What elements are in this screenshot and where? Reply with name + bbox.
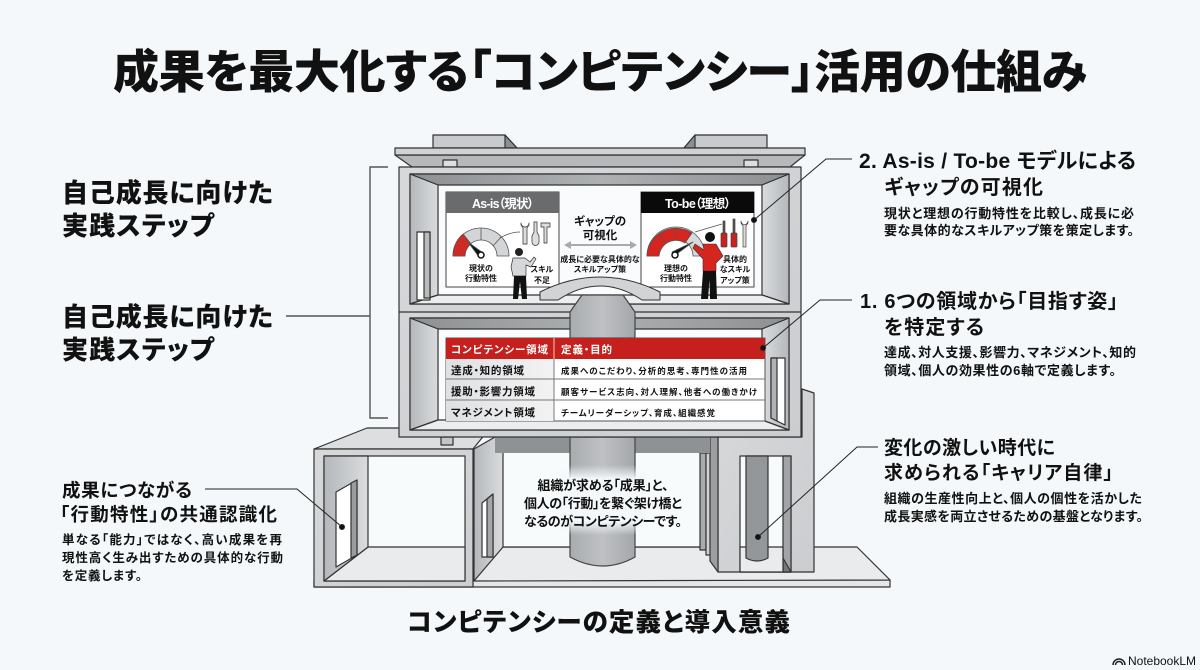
building illustration xyxy=(314,135,890,587)
figure: To-be person xyxy=(693,232,723,299)
center text xyxy=(524,478,682,529)
panel: To-be: To-be（理想） xyxy=(665,196,731,211)
center text: 個人の「行動」を繋ぐ架け橋と xyxy=(524,496,682,511)
panel: To-be: なスキル xyxy=(720,265,750,274)
left heading 1: 自己成長に向けた xyxy=(62,178,273,208)
lower storey: ground floor xyxy=(314,389,890,587)
icon: tools red xyxy=(721,219,748,247)
gap label xyxy=(560,215,640,274)
gap label: ギャップの xyxy=(574,215,626,228)
competency table: 定義・目的 xyxy=(561,343,612,356)
left callout: を定義します。 xyxy=(62,568,142,583)
callout: career: 変化の激しい時代に xyxy=(884,437,1055,459)
panel: To-be: 行動特性 xyxy=(660,273,692,283)
upper room xyxy=(410,174,789,304)
base slab xyxy=(314,580,890,587)
leader: step 2 xyxy=(752,159,852,222)
gap label: スキルアップ策 xyxy=(574,264,626,274)
callout: step 2: 現状と理想の行動特性を比較し、成長に必 xyxy=(884,206,1134,221)
callout: step 1: を特定する xyxy=(884,316,984,339)
competency table xyxy=(446,338,765,421)
left heading 2: 実践ステップ xyxy=(62,335,215,365)
fade behind center text xyxy=(560,465,645,535)
left callout: 「行動特性」の共通認識化 xyxy=(60,504,277,525)
callout: career: 求められる「キャリア自律」 xyxy=(884,461,1113,484)
figure: As-is person xyxy=(511,248,536,299)
left heading 2 xyxy=(62,302,273,365)
small stub xyxy=(441,437,453,445)
callout: step 2: 2. As-is / To-be モデルによる xyxy=(859,149,1136,173)
NotebookLM logo: NotebookLM xyxy=(1128,654,1196,668)
callout: step 1 xyxy=(860,290,1136,378)
bracket: upper floors xyxy=(286,167,388,418)
panel: As-is: 不足 xyxy=(534,276,550,285)
competency table: コンピテンシー領域 xyxy=(451,343,548,356)
roof slab xyxy=(395,155,805,167)
competency table: 成果へのこだわり、分析的思考、専門性の活用 xyxy=(561,366,747,376)
callout: step 2: ギャップの可視化 xyxy=(884,176,1043,199)
back white wall xyxy=(500,450,715,547)
icon: tools xyxy=(521,222,550,246)
panel: As-is: 行動特性 xyxy=(465,273,497,283)
callout: step 1: 領域、個人の効果性の6軸で定義します。 xyxy=(884,363,1116,378)
competency table: 顧客サービス志向、対人理解、他者への働きかけ xyxy=(561,387,757,397)
left callout: 現性高く生み出すための具体的な行動 xyxy=(62,550,283,565)
left heading 1 xyxy=(62,178,273,241)
roof vents xyxy=(443,160,457,167)
left heading 2: 自己成長に向けた xyxy=(62,302,273,332)
left heading 1: 実践ステップ xyxy=(62,211,215,241)
panel: To-be: 具体的 xyxy=(723,254,747,264)
upper storey: top frame xyxy=(395,135,805,437)
caption: コンピテンシーの定義と導入意義 xyxy=(407,609,790,637)
arrow: gap xyxy=(564,241,637,249)
gap label: 可視化 xyxy=(583,228,618,242)
outer frame xyxy=(399,167,801,437)
callout: step 2: 要な具体的なスキルアップ策を策定します。 xyxy=(884,223,1134,238)
callout: career xyxy=(884,437,1143,524)
left callout: 成果につながる xyxy=(62,480,192,501)
panel: As-is: 現状の xyxy=(469,263,493,273)
left room door xyxy=(336,480,357,567)
competency table: チームリーダーシップ、育成、組織感覚 xyxy=(561,408,715,418)
left room xyxy=(314,449,473,587)
gauge: As-is xyxy=(453,228,520,258)
panel: To-be: 理想の xyxy=(664,263,688,273)
pillar upper xyxy=(570,295,635,338)
competency table: 達成・知的領域 xyxy=(451,364,524,377)
callout: step 1: 1. 6つの領域から「目指す姿」 xyxy=(860,290,1118,313)
center text: なるのがコンピテンシーです。 xyxy=(524,514,682,529)
leader: step 1 xyxy=(760,300,852,350)
right wall block xyxy=(718,389,814,572)
arch bridge xyxy=(540,277,660,300)
leader: career xyxy=(756,447,878,540)
lower room xyxy=(410,318,789,430)
gauge: To-be xyxy=(647,224,722,258)
callout: career: 組織の生産性向上と、個人の個性を活かした xyxy=(884,491,1142,506)
right back stripes xyxy=(700,453,706,550)
upper window xyxy=(417,232,430,300)
partition wall xyxy=(474,437,503,581)
callout: career: 成長実感を両立させるための基盤となります。 xyxy=(884,509,1143,524)
panel: To-be xyxy=(641,192,754,299)
leader: left callout xyxy=(205,489,344,530)
centre pillar xyxy=(570,437,635,566)
callout: step 2 xyxy=(859,149,1136,238)
panel: As-is xyxy=(446,192,559,299)
gap label: 成長に必要な具体的な xyxy=(560,254,640,264)
panel: To-be: アップ策 xyxy=(720,275,750,285)
left callout: 単なる「能力」ではなく、高い成果を再 xyxy=(62,532,282,547)
competency table: マネジメント領域 xyxy=(450,406,536,419)
lower door xyxy=(771,358,785,425)
left callout xyxy=(60,480,283,583)
panel: As-is: スキル xyxy=(530,265,553,274)
panel: As-is: As-is（現状） xyxy=(472,196,534,211)
left room roof xyxy=(314,428,490,449)
center text: 組織が求める「成果」と、 xyxy=(538,478,668,493)
roof blocks xyxy=(433,135,517,148)
callout: step 1: 達成、対人支援、影響力、マネジメント、知的 xyxy=(884,345,1136,360)
title: 成果を最大化する「コンピテンシー」活用の仕組み xyxy=(113,46,1087,98)
dark beam xyxy=(495,437,710,453)
competency table: 援助・影響力領域 xyxy=(451,385,536,398)
